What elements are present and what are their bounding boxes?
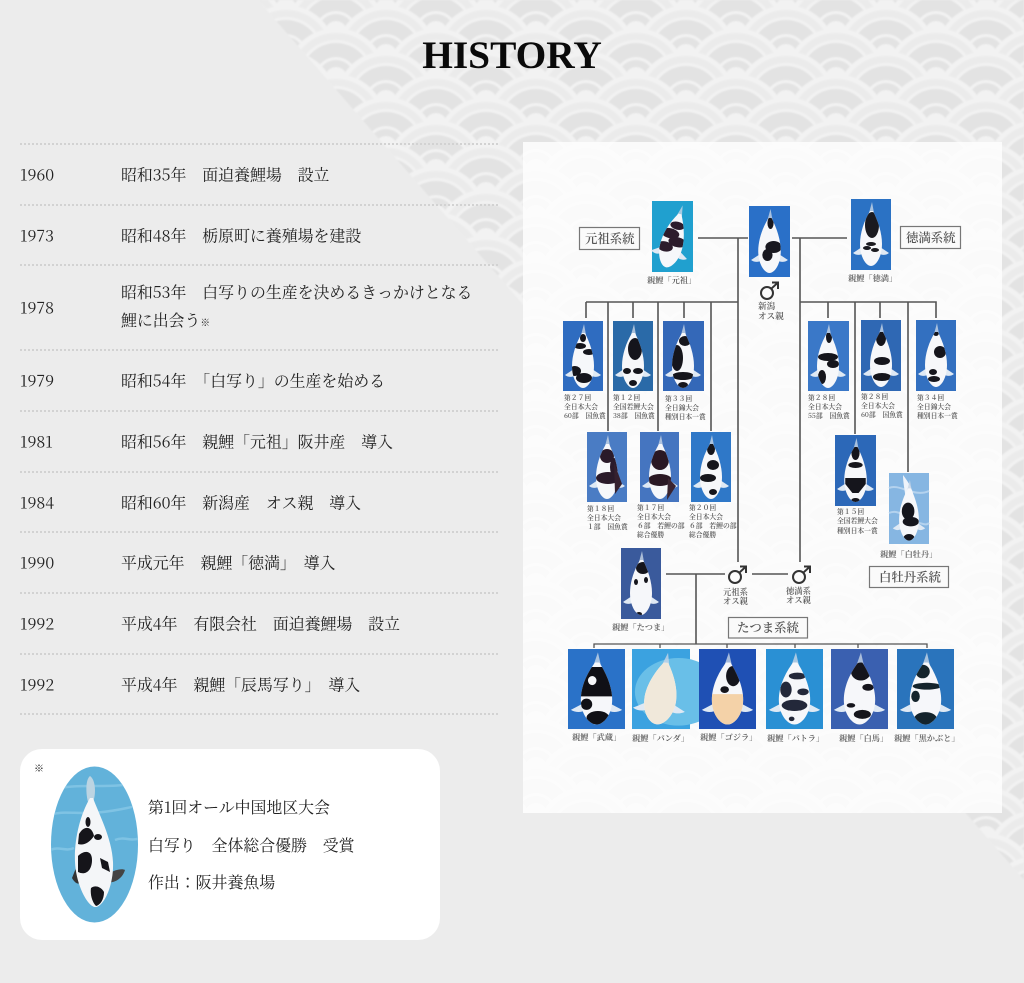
- caption: 第28回 55部: [808, 392, 851, 420]
- caption: 第17回: 第１７回: [637, 502, 664, 512]
- label: 徳満系統: 徳満系統: [906, 228, 956, 246]
- timeline row 1978: [20, 264, 498, 349]
- photo: 黒かぶと: [897, 649, 954, 729]
- photo: 元祖: [651, 201, 693, 272]
- timeline row 1981: [20, 410, 498, 471]
- photo: パトラ: [766, 649, 823, 729]
- photo: パンダ: [632, 649, 699, 729]
- photo: 第15回: [835, 435, 876, 506]
- timeline row 1992 koi: [20, 653, 498, 715]
- photo: 武蔵: [568, 649, 625, 729]
- photo: 第33回: [663, 321, 704, 391]
- lineage connector lines: [586, 238, 936, 648]
- caption: 第20回: 総合優勝: [689, 529, 716, 539]
- timeline row 1979: [20, 349, 498, 410]
- label: 白牡丹系統: 白牡丹系統: [879, 568, 942, 586]
- caption: パンダ: 親鯉「パンダ」: [632, 733, 689, 744]
- timeline row 1973: [20, 204, 498, 264]
- icon: male symbol: [761, 282, 778, 299]
- caption: 第27回: 第２７回: [564, 392, 591, 402]
- timeline row 1960: [20, 143, 498, 204]
- label: 元祖系統: [580, 228, 640, 250]
- photo: ゴジラ: [699, 649, 756, 729]
- panel: award note: [20, 749, 440, 940]
- caption: 第18回: １部 国魚賞: [587, 521, 629, 531]
- caption: 元祖系オス親: [723, 586, 749, 607]
- caption: 第28回 60部: 60部 国魚賞: [861, 409, 904, 419]
- caption: 第27回: 全日本大会: [564, 401, 598, 411]
- photo: 第20回: [691, 432, 731, 502]
- caption: 第18回: 全日本大会: [587, 512, 621, 522]
- timeline row 1979: 1979: [20, 368, 54, 391]
- caption: 第15回: 種別日本一賞: [837, 525, 879, 535]
- photo: 新潟オス親: [749, 206, 790, 277]
- caption: 第17回: ６部 若鯉の部: [637, 520, 685, 530]
- timeline row 1992 koi: 平成4年 親鯉「辰馬写り」 導入: [121, 672, 360, 695]
- caption: 武蔵: 親鯉「武蔵」: [572, 732, 621, 743]
- caption: 第33回: [665, 393, 707, 421]
- photo: 第34回: [916, 320, 956, 391]
- icon: oval koi photo: [51, 766, 138, 922]
- caption: 第17回: 総合優勝: [637, 529, 664, 539]
- timeline row 1973: 昭和48年 栃原町に養殖場を建設: [121, 223, 361, 246]
- caption: 第34回: 種別日本一賞: [917, 410, 959, 420]
- caption: 第34回: [917, 392, 959, 420]
- caption: 第18回: [587, 503, 629, 531]
- caption: 徳満系オス親: 徳満系: [786, 585, 812, 597]
- timeline row 1984: 1984: [20, 490, 54, 513]
- caption: 第15回: 第１５回: [837, 506, 864, 516]
- caption: 第20回: [689, 502, 737, 539]
- title: HISTORY: [422, 33, 602, 77]
- caption: 第12回: 38部 国魚賞: [613, 410, 656, 420]
- timeline row 1992 koi: 1992: [20, 672, 54, 695]
- caption: 第12回: 全国若鯉大会: [613, 401, 654, 411]
- caption: 元祖系オス親: オス親: [723, 595, 749, 607]
- caption: 第12回: [613, 392, 656, 420]
- caption: 元祖系オス親: 元祖系: [723, 586, 749, 598]
- caption: 第34回: 全日錦大会: [917, 401, 951, 411]
- caption: 新潟オス親: 新潟: [758, 300, 776, 312]
- panel: koi lineage chart: [523, 142, 1002, 813]
- caption: 元祖: 親鯉「元祖」: [647, 275, 696, 286]
- caption: 黒かぶと: 親鯉「黒かぶと」: [894, 733, 960, 744]
- icon: 元祖系 male symbol: [729, 566, 746, 583]
- timeline row 1981: 1981: [20, 429, 53, 452]
- caption: 第15回: 全国若鯉大会: [837, 515, 878, 525]
- photo: たつま: [621, 548, 661, 619]
- panel: history timeline: [20, 143, 498, 715]
- timeline row 1978: 昭和53年 白写りの生産を決めるきっかけとなる: [121, 280, 472, 303]
- caption: 第28回 55部: 55部 国魚賞: [808, 410, 851, 420]
- photo: 第17回: [640, 432, 679, 502]
- timeline row 1984: 昭和60年 新潟産 オス親 導入: [121, 490, 361, 513]
- timeline row 1992 company: 1992: [20, 611, 54, 634]
- caption: 新潟オス親: [758, 300, 784, 322]
- timeline row 1992 company: [20, 592, 498, 653]
- caption: 第33回: 全日錦大会: [665, 402, 699, 412]
- caption: 第20回: 全日本大会: [689, 511, 723, 521]
- timeline row 1973: 1973: [20, 223, 54, 246]
- caption: 第15回: [837, 506, 879, 535]
- caption: たつま: 親鯉「たつま」: [612, 622, 669, 633]
- note line 2: 白写り 全体総合優勝 受賞: [148, 833, 355, 856]
- timeline row 1978: 鯉に出会う※: [121, 308, 210, 330]
- caption: 新潟オス親: オス親: [758, 310, 784, 322]
- icon: 徳満系 male symbol: [793, 566, 810, 583]
- caption: 第17回: [637, 502, 685, 539]
- label: たつま系統: たつま系統: [737, 618, 800, 636]
- timeline row 1984: [20, 471, 498, 531]
- caption: 第18回: 第１８回: [587, 503, 614, 513]
- label: 白牡丹系統: [870, 566, 948, 588]
- timeline row 1979: 昭和54年 「白写り」の生産を始める: [121, 368, 385, 391]
- caption: パトラ: 親鯉「パトラ」: [767, 733, 824, 744]
- caption: 第27回: [564, 392, 607, 420]
- caption: 第12回: 第１２回: [613, 392, 640, 402]
- caption: 徳満系オス親: [786, 585, 812, 606]
- photo: 第27回: [563, 321, 603, 391]
- timeline row 1960: 昭和35年 面迫養鯉場 設立: [121, 162, 329, 185]
- timeline row 1960: 1960: [20, 162, 54, 185]
- caption: 徳満系オス親: オス親: [786, 594, 812, 606]
- caption: 白牡丹: 親鯉「白牡丹」: [880, 549, 937, 560]
- timeline row 1990: 平成元年 親鯉「徳満」 導入: [121, 550, 336, 573]
- caption: 第20回: ６部 若鯉の部: [689, 520, 737, 530]
- photo: 白牡丹: [889, 473, 929, 544]
- caption: 第34回: 第３４回: [917, 392, 944, 402]
- caption: 第27回: 60部 国魚賞: [564, 410, 607, 420]
- label: たつま系統: [728, 618, 808, 638]
- label: 元祖系統: 元祖系統: [585, 229, 635, 247]
- caption: 第28回 60部: [861, 391, 904, 419]
- caption: 第28回 55部: 全日本大会: [808, 401, 842, 411]
- caption: 第17回: 全日本大会: [637, 511, 671, 521]
- photo: 第18回: [587, 432, 627, 502]
- photo: 徳満: [851, 199, 891, 270]
- label: 徳満系統: [900, 226, 960, 248]
- photo: 第12回: [613, 321, 653, 391]
- caption: 徳満: 親鯉「徳満」: [848, 273, 897, 284]
- caption: 第33回: 第３３回: [665, 393, 692, 403]
- photo: 白馬: [831, 649, 888, 729]
- timeline row 1990: 1990: [20, 550, 54, 573]
- note marker: ※: [34, 760, 44, 775]
- caption: 第28回 55部: 第２８回: [808, 392, 835, 402]
- caption: 白馬: 親鯉「白馬」: [839, 733, 888, 744]
- photo: 第28回 55部: [808, 321, 849, 391]
- photo: 第28回 60部: [861, 320, 901, 391]
- note line 1: 第1回オール中国地区大会: [148, 795, 330, 818]
- note line 3: 作出：阪井養魚場: [148, 870, 275, 893]
- timeline row 1992 company: 平成4年 有限会社 面迫養鯉場 設立: [121, 611, 400, 634]
- timeline row 1990: [20, 531, 498, 592]
- caption: ゴジラ: 親鯉「ゴジラ」: [700, 732, 757, 743]
- caption: 第33回: 種別日本一賞: [665, 411, 707, 421]
- caption: 第20回: 第２０回: [689, 502, 716, 512]
- timeline row 1981: 昭和56年 親鯉「元祖」阪井産 導入: [121, 429, 393, 452]
- caption: 第28回 60部: 全日本大会: [861, 400, 895, 410]
- timeline row 1978: 1978: [20, 295, 54, 318]
- caption: 第28回 60部: 第２８回: [861, 391, 888, 401]
